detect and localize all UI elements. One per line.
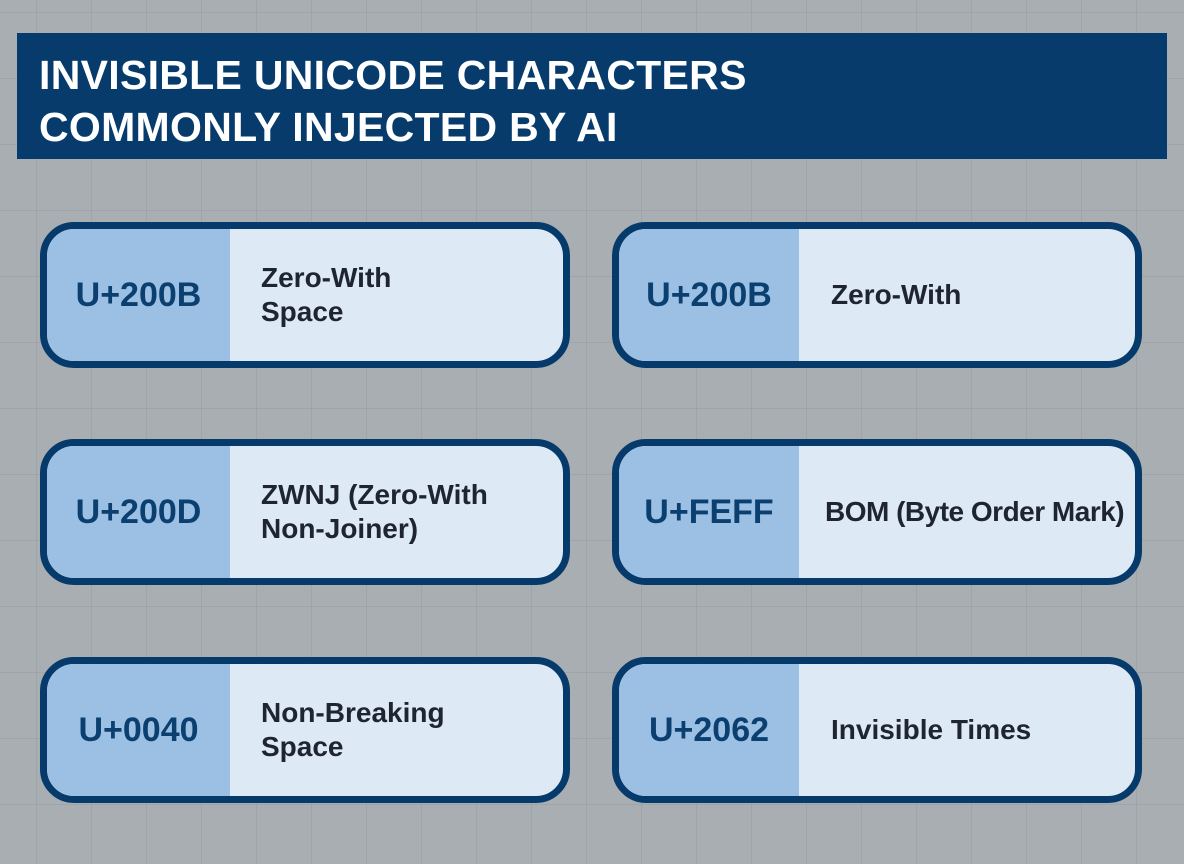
card: U+2062 invisible times	[612, 657, 1142, 803]
card: U+200B zero-with: U+200B	[646, 276, 772, 314]
card: U+FEFF BOM: BOM (Byte Order Mark)	[825, 496, 1124, 527]
card: U+200D ZWNJ: U+200D	[76, 492, 201, 530]
card: U+2062 invisible times: Invisible Times	[831, 714, 1031, 745]
card: U+FEFF BOM	[612, 439, 1142, 585]
card: U+200B zero-with: Zero-With	[831, 279, 961, 310]
card: U+0040 non-breaking space: Non-Breaking	[261, 697, 445, 728]
card: U+200B zero-with	[612, 222, 1142, 368]
title: COMMONLY INJECTED BY AI	[39, 104, 618, 150]
card: U+200B zero-width space: U+200B	[76, 276, 201, 314]
card: U+0040 non-breaking space: U+0040	[78, 710, 199, 748]
card: U+2062 invisible times: U+2062	[649, 710, 769, 748]
card: U+200D ZWNJ: Non-Joiner)	[261, 513, 418, 544]
card: U+200B zero-width space	[40, 222, 570, 368]
card: U+FEFF BOM: U+FEFF	[644, 492, 774, 530]
card: U+0040 non-breaking space: Space	[261, 731, 344, 762]
title	[17, 33, 1167, 159]
card: U+200D ZWNJ	[40, 439, 570, 585]
card: U+200B zero-width space: Space	[261, 296, 344, 327]
card: U+200B zero-width space: Zero-With	[261, 262, 391, 293]
card: U+200D ZWNJ: ZWNJ (Zero-With	[261, 479, 488, 510]
card: U+0040 non-breaking space	[40, 657, 570, 803]
title: INVISIBLE UNICODE CHARACTERS	[39, 52, 747, 98]
